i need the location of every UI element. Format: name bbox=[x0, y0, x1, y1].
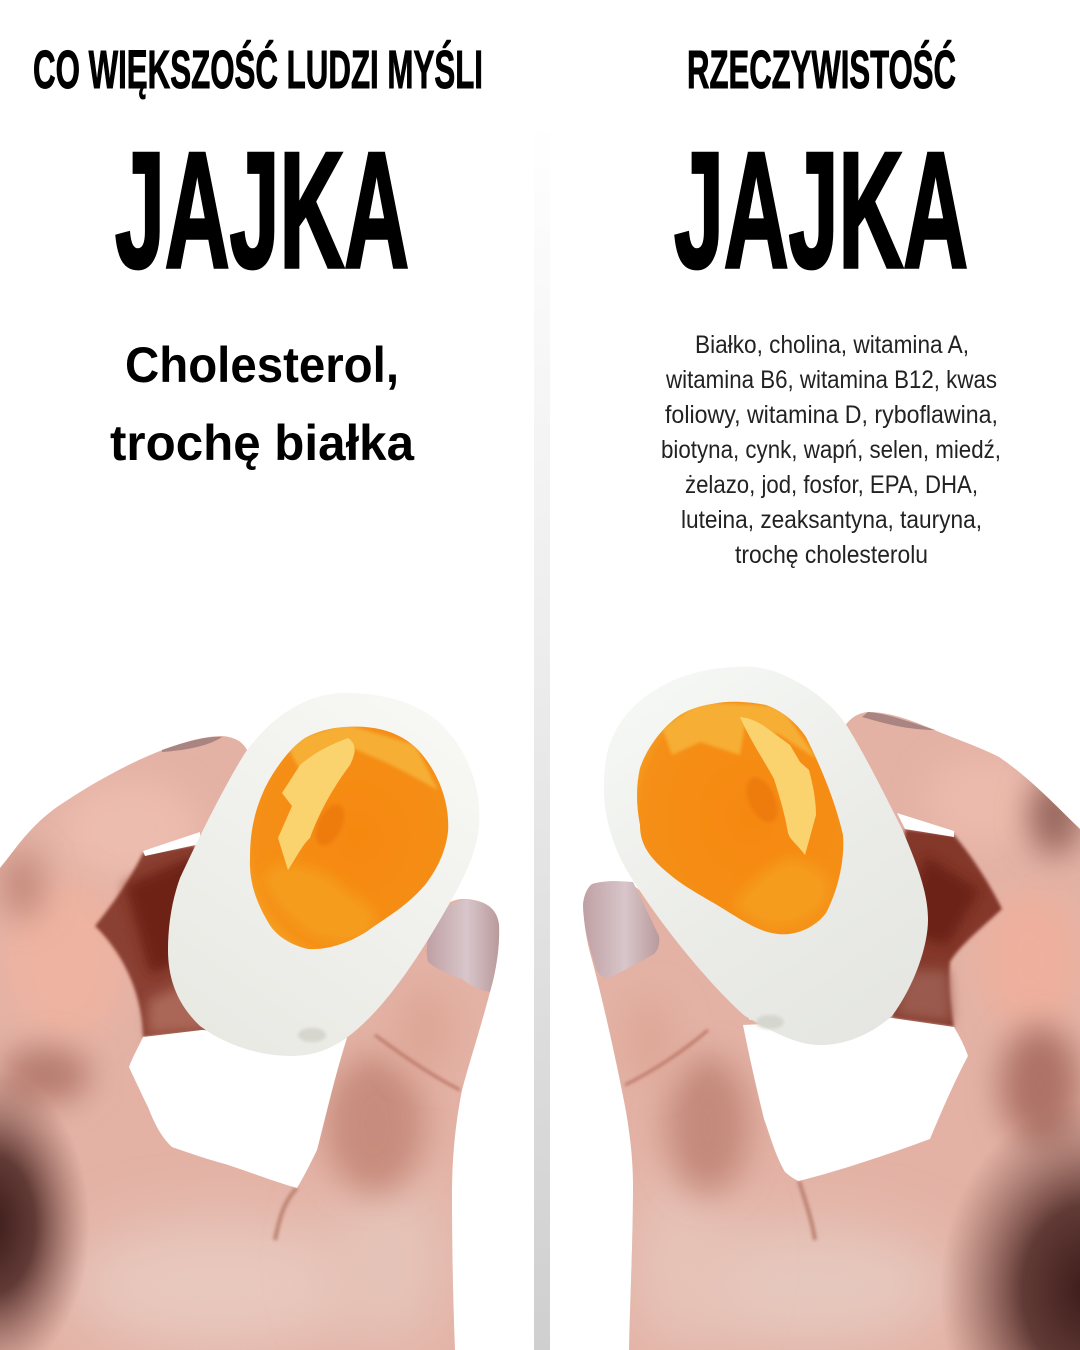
text block: nutrient list: luteina, zeaksantyna, tauryna, bbox=[681, 506, 982, 534]
index nail bbox=[862, 712, 935, 730]
illustration: right hand holding egg bbox=[560, 667, 1080, 1350]
text block: nutrient list: foliowy, witamina D, ryboflawina, bbox=[665, 401, 998, 429]
middle finger in shadow bbox=[892, 829, 1002, 1027]
right egg bbox=[604, 667, 928, 1045]
text block: myth: trochę białka bbox=[110, 415, 415, 471]
right hand bbox=[560, 700, 1080, 1350]
creases bbox=[625, 1030, 708, 1085]
text block: nutrient list: żelazo, jod, fosfor, EPA, DHA, bbox=[685, 471, 978, 499]
illustration: left hand holding egg bbox=[0, 693, 520, 1350]
text block: nutrient list: Białko, cholina, witamina A, bbox=[695, 331, 969, 359]
hand gap bbox=[743, 1018, 968, 1181]
creases bbox=[375, 1035, 460, 1090]
finger sliver bbox=[897, 813, 954, 837]
thumb nail bbox=[583, 881, 659, 978]
hand gap bbox=[129, 1030, 347, 1188]
heading: what most people think: CO WIĘKSZOŚĆ LUDZI MYŚLI bbox=[33, 40, 483, 100]
title: eggs left: JAJKA bbox=[115, 118, 409, 302]
left hand bbox=[0, 700, 520, 1350]
text block: nutrient list: biotyna, cynk, wapń, selen, miedź, bbox=[661, 436, 1001, 464]
finger sliver bbox=[143, 832, 200, 856]
left egg bbox=[168, 693, 479, 1056]
text block: myth bbox=[110, 337, 415, 471]
middle finger in shadow bbox=[95, 845, 215, 1037]
index nail bbox=[162, 737, 222, 752]
text block: myth: Cholesterol, bbox=[125, 337, 399, 393]
text block: nutrient list: trochę cholesterolu bbox=[735, 541, 928, 569]
text block: nutrient list bbox=[661, 331, 1001, 569]
text block: nutrient list: witamina B6, witamina B12, kwas bbox=[665, 366, 997, 394]
center divider bbox=[534, 0, 550, 1350]
thumb nail bbox=[427, 900, 499, 992]
